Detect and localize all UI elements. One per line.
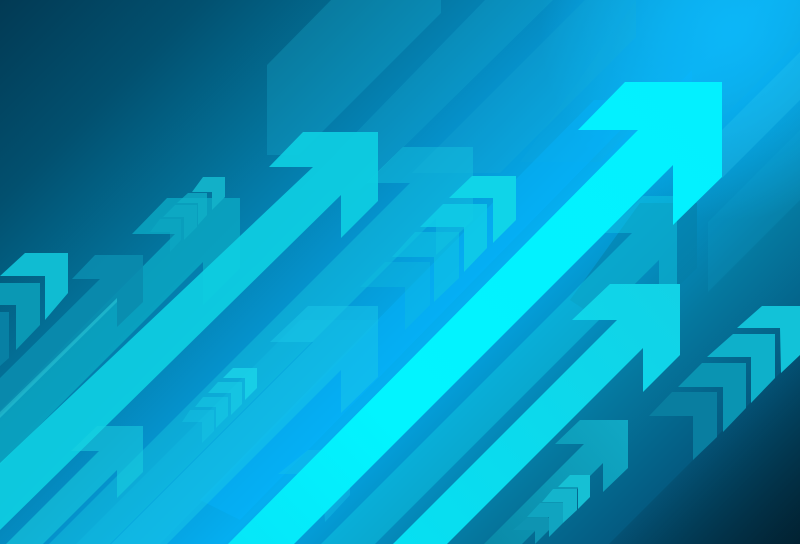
small chevrons lower middle bbox=[182, 368, 257, 443]
chevron 3 bbox=[0, 312, 9, 366]
dark lower-right corner bbox=[609, 353, 800, 544]
blue stripe beside main arrow bbox=[200, 100, 650, 520]
small chevrons bottom bbox=[513, 475, 590, 544]
lower left light stripe bbox=[76, 320, 380, 544]
chevrons upper left bbox=[150, 177, 225, 252]
arrow: pale behind main, right bbox=[321, 196, 677, 544]
arrow: dark behind right bbox=[570, 203, 697, 320]
arrow: lower left bbox=[6, 426, 143, 544]
arrow: left medium bbox=[0, 255, 143, 415]
arrow: mid lower pale bbox=[111, 306, 378, 544]
arrow: teal upper left bbox=[0, 198, 240, 465]
arrow: faint behind main, bottom bbox=[278, 450, 350, 522]
chevrons right edge bbox=[649, 306, 800, 460]
arrow: lower right bbox=[484, 420, 628, 544]
light bands right of main arrow bbox=[708, 52, 800, 292]
thin light sliver on left stripe bbox=[0, 298, 117, 418]
arrow: upper left bright bbox=[0, 132, 378, 530]
arrow: central large pale bbox=[49, 147, 473, 544]
small chevrons far left bbox=[0, 253, 68, 366]
arrow: main large bright bbox=[228, 82, 722, 544]
chevrons centre bbox=[360, 176, 516, 330]
chevron 1 bbox=[0, 253, 68, 320]
faint large arrow bands at top bbox=[267, 0, 800, 190]
chevron 2 bbox=[0, 283, 40, 350]
arrow: second bright lower right bbox=[393, 284, 680, 544]
